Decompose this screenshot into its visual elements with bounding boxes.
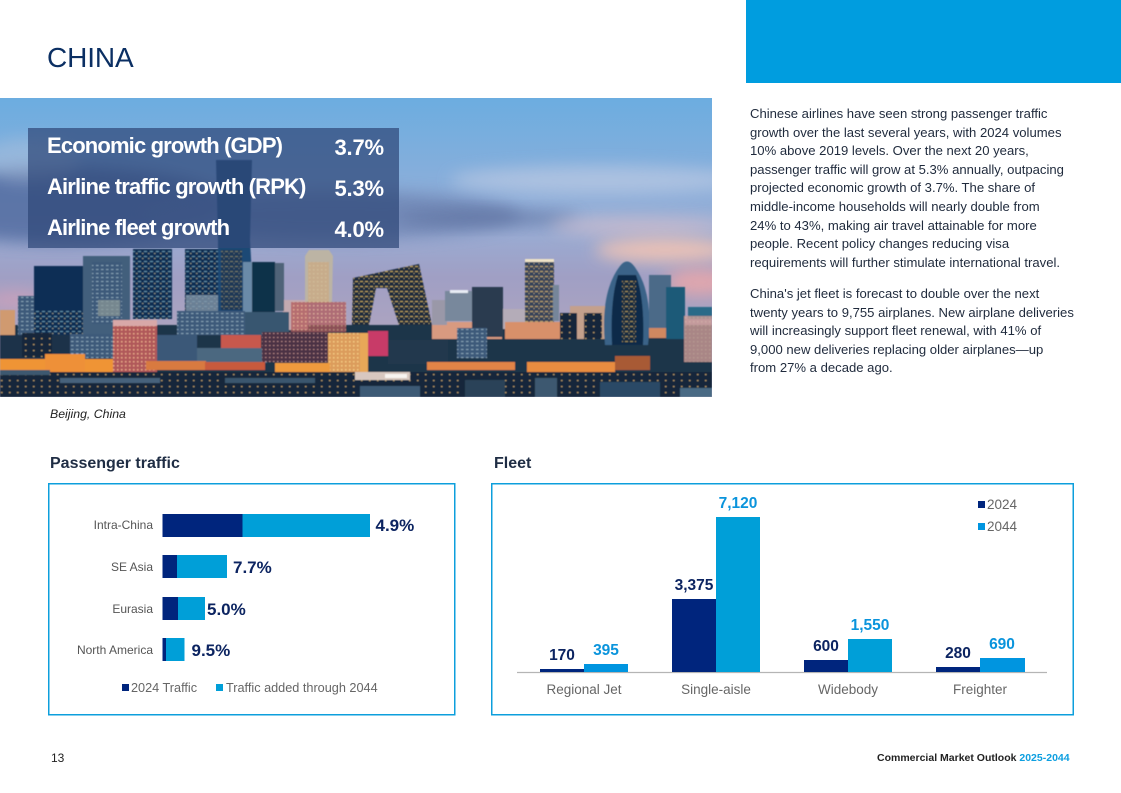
- body text: 10% above 2019 levels. Over the next 20 years,: [750, 143, 1029, 158]
- row: Intra-China: Intra-China: [94, 518, 153, 532]
- legend: 2024: [987, 497, 1018, 512]
- page number: 13: [51, 751, 64, 765]
- row: Eurasia: 5.0%: [207, 600, 246, 619]
- group: Single-aisle: [672, 495, 760, 697]
- skyline buildings: [0, 160, 712, 397]
- group: Single-aisle: Single-aisle: [681, 682, 751, 697]
- group: Widebody: [804, 617, 892, 697]
- header blue block: [746, 0, 1121, 83]
- body text: passenger traffic will grow at 5.3% annually, outpacing: [750, 162, 1064, 177]
- body text: [750, 106, 1074, 375]
- legend: [122, 681, 378, 695]
- stats overlay panel: [28, 128, 399, 248]
- group: Freighter: 690: [989, 636, 1015, 653]
- row: SE Asia: 7.7%: [233, 558, 272, 577]
- body text: requirements will further stimulate international travel.: [750, 255, 1060, 270]
- stat: GDP label: Economic growth (GDP): [47, 133, 282, 158]
- body text: growth over the last several years, with 2024 volumes: [750, 125, 1062, 140]
- CCTV building: [352, 264, 432, 325]
- group: Single-aisle: 3,375: [675, 577, 714, 594]
- photo caption: Beijing, China: [50, 407, 126, 421]
- chart: fleet: [491, 483, 1074, 716]
- row: SE Asia: SE Asia: [111, 560, 153, 574]
- legend: 2044: [987, 519, 1018, 534]
- chart: passenger traffic: [48, 483, 456, 716]
- row: Intra-China: 4.9%: [376, 516, 414, 535]
- row: Intra-China: [94, 514, 414, 537]
- row: Eurasia: Eurasia: [112, 602, 153, 616]
- heading: fleet: Fleet: [494, 455, 531, 472]
- group: Single-aisle: 7,120: [719, 495, 757, 512]
- far layer: [0, 325, 712, 397]
- group: Regional Jet: Regional Jet: [546, 682, 622, 697]
- row: North America: 9.5%: [192, 641, 230, 660]
- body text: people. Recent policy changes reducing visa: [750, 236, 1009, 251]
- stat: RPK label: Airline traffic growth (RPK): [47, 174, 306, 199]
- stat: GDP value: 3.7%: [334, 135, 384, 160]
- group: Regional Jet: 395: [593, 642, 619, 659]
- group: Regional Jet: [540, 642, 628, 697]
- group: Widebody: 1,550: [851, 617, 889, 634]
- legend: [978, 497, 1018, 534]
- group: Freighter: Freighter: [953, 682, 1008, 697]
- legend: 2024 Traffic: [131, 681, 198, 695]
- stat: RPK value: 5.3%: [334, 176, 384, 201]
- title: CHINA: [47, 42, 134, 73]
- row: Eurasia: [112, 597, 246, 620]
- group: Widebody: 600: [813, 638, 839, 655]
- left towers: [0, 310, 15, 340]
- right towers: [445, 291, 472, 321]
- mid layer: [0, 335, 113, 362]
- footer text: Commercial Market Outlook 2025-2044: [877, 752, 1070, 764]
- body text: middle-income households will nearly double from: [750, 199, 1040, 214]
- body text: will increasingly support fleet renewal, with 41% of: [750, 323, 1041, 338]
- body text: from 27% a decade ago.: [750, 360, 893, 375]
- glow strips: [0, 359, 113, 372]
- row: SE Asia: [111, 555, 272, 578]
- stat: fleet label: Airline fleet growth: [47, 215, 229, 240]
- body text: twenty years to 9,755 airplanes. New airplane deliveries: [750, 305, 1074, 320]
- photo: Beijing skyline: [0, 98, 712, 397]
- row: North America: North America: [77, 643, 153, 657]
- body text: Chinese airlines have seen strong passenger traffic: [750, 106, 1047, 121]
- group: Widebody: Widebody: [818, 682, 878, 697]
- body text: projected economic growth of 3.7%. The share of: [750, 180, 1035, 195]
- group: Regional Jet: 170: [549, 647, 575, 664]
- body text: 24% to 43%, making air travel attainable for more: [750, 218, 1037, 233]
- group: Freighter: [936, 636, 1025, 697]
- foreground: [0, 372, 712, 397]
- stat: fleet value: 4.0%: [334, 217, 384, 242]
- group: Freighter: 280: [945, 645, 971, 662]
- body text: China's jet fleet is forecast to double over the next: [750, 286, 1039, 301]
- heading: passenger traffic: Passenger traffic: [50, 455, 180, 472]
- row: North America: [77, 638, 230, 661]
- body text: 9,000 new deliveries replacing older airplanes—up: [750, 342, 1043, 357]
- legend: Traffic added through 2044: [226, 681, 378, 695]
